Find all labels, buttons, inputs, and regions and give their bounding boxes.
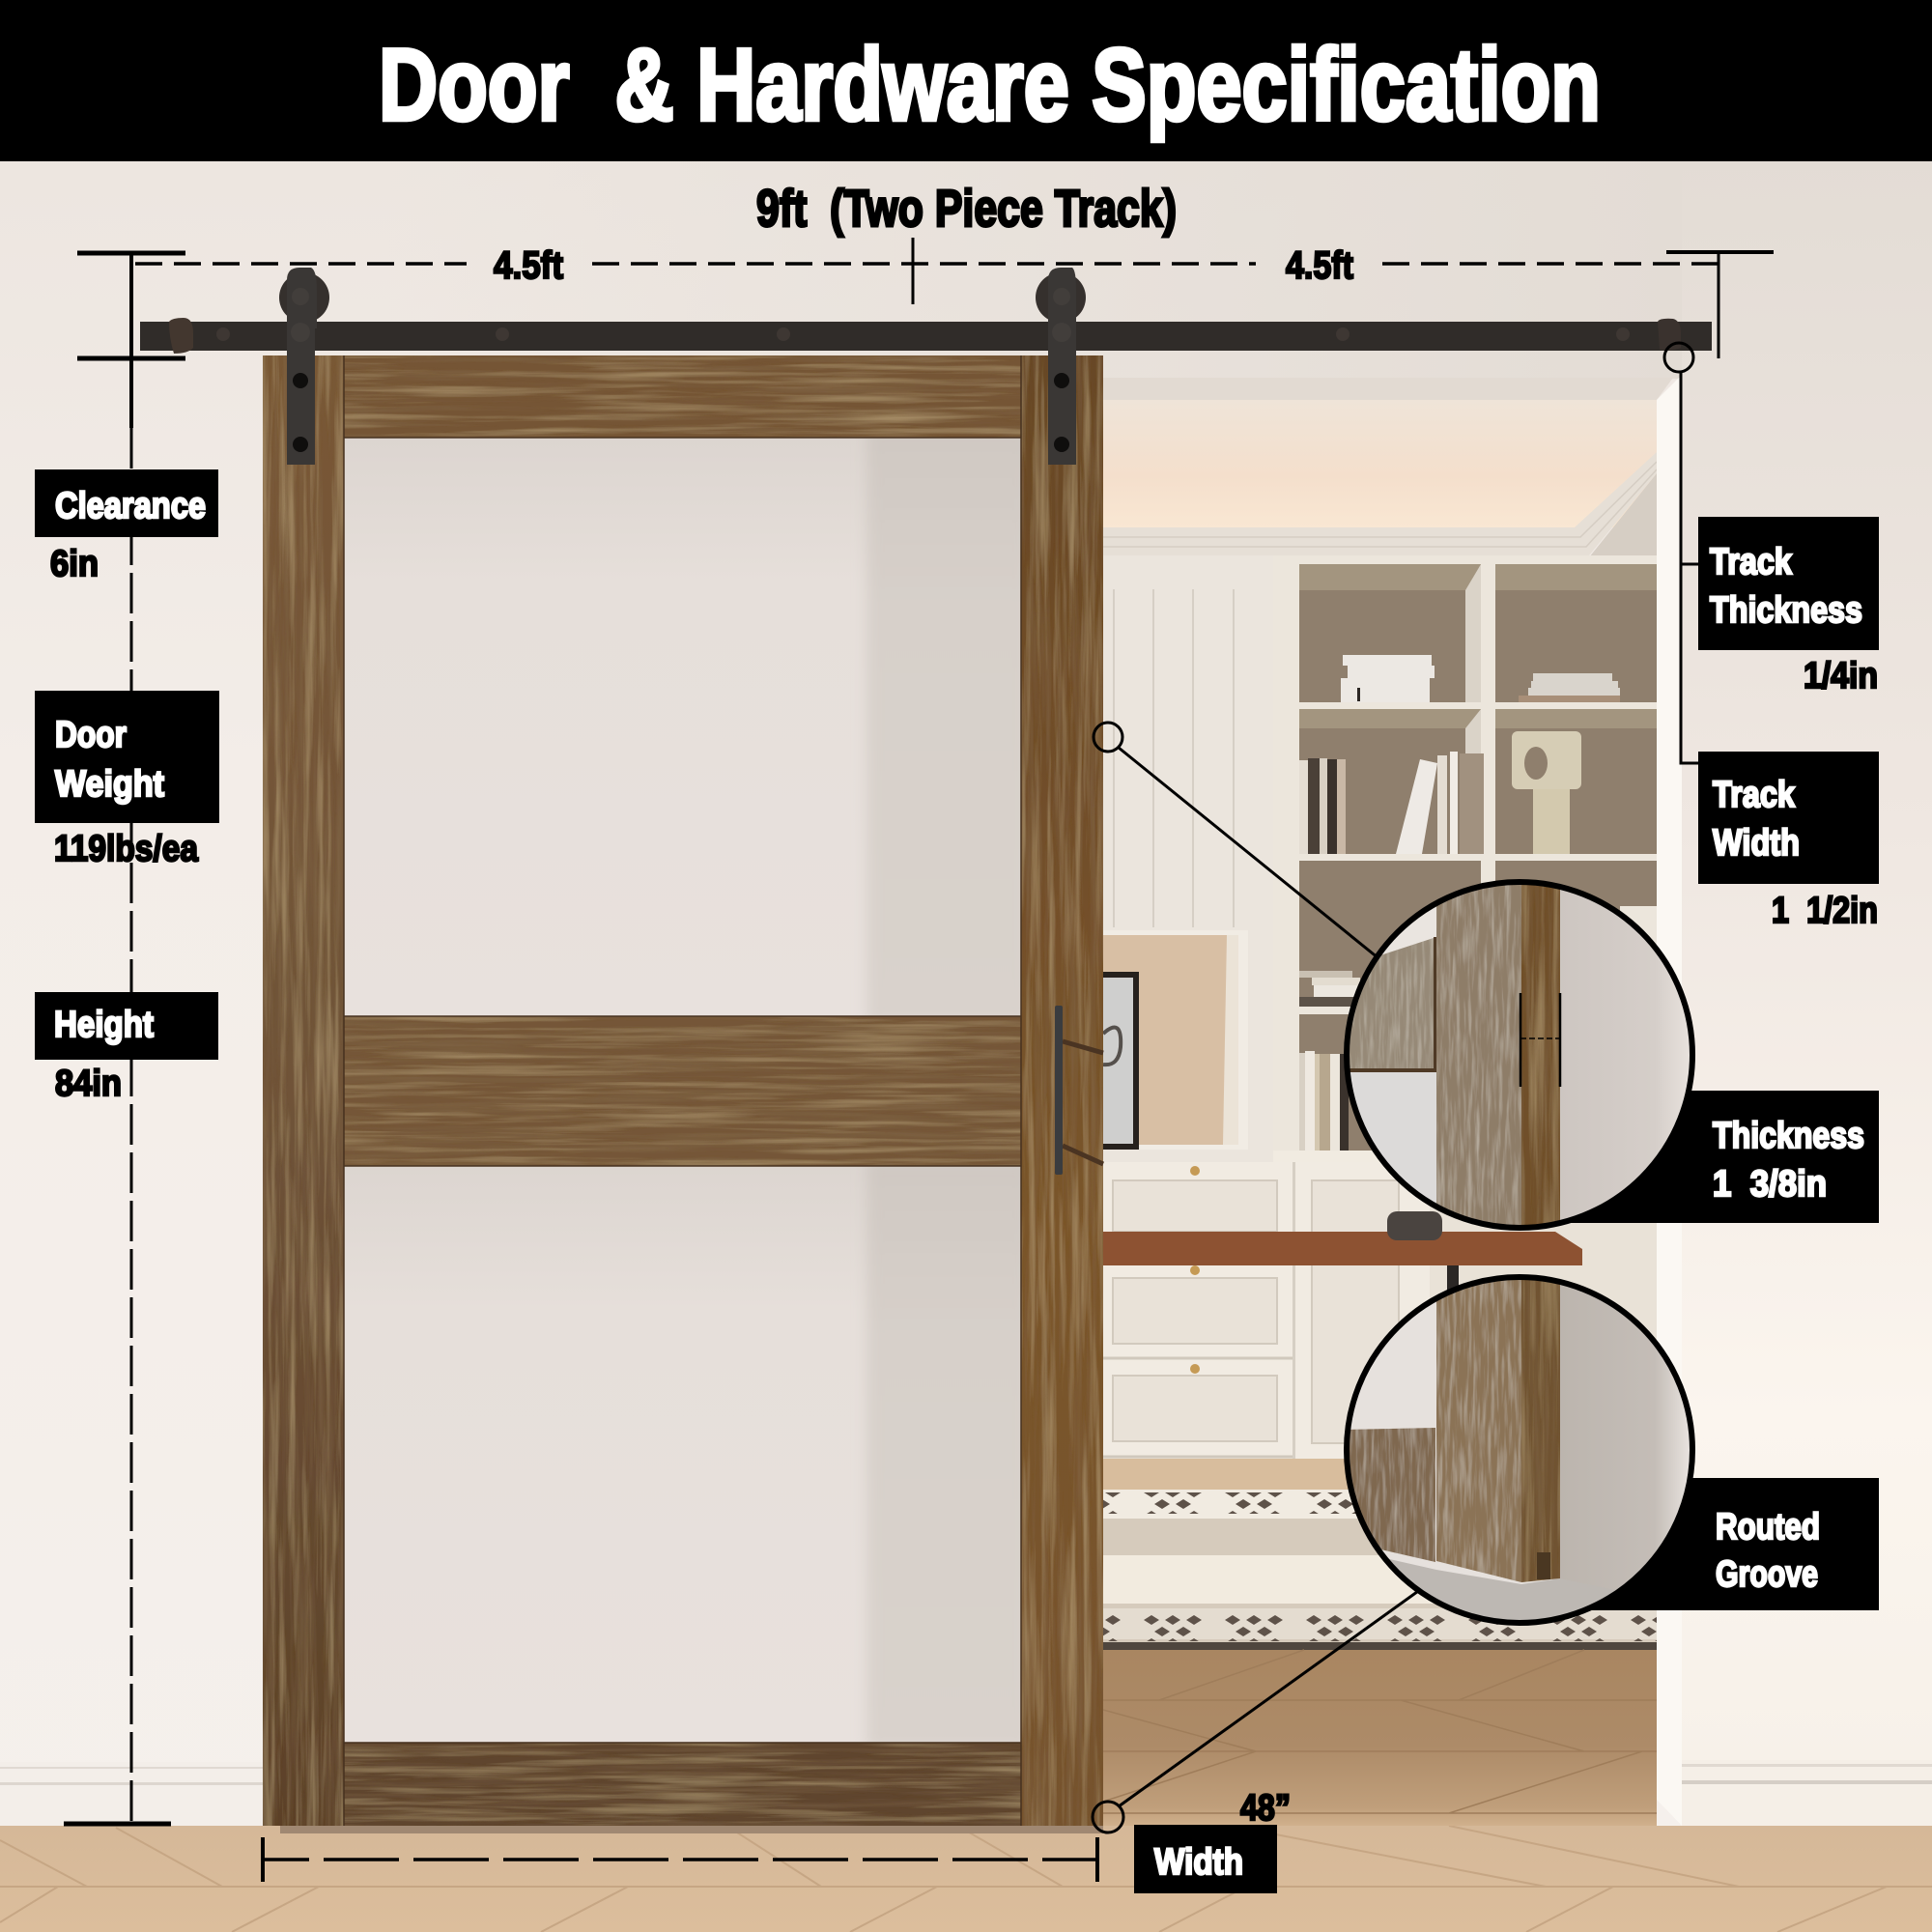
top glass panel (344, 425, 1031, 1024)
label: track thickness: Thickness (1710, 590, 1862, 631)
value: height: 84in (55, 1064, 122, 1104)
left stile (263, 355, 344, 1826)
value: track thickness: 1/4in (1804, 656, 1878, 696)
label: routed groove: Groove (1716, 1554, 1818, 1595)
label: door weight (35, 691, 219, 823)
magnifier: door thickness detail (1347, 882, 1695, 1235)
sculpture (1512, 731, 1581, 854)
bottom glass panel (344, 1159, 1031, 1748)
title: Door & Hardware Specification (379, 28, 1601, 142)
books: middle row (1299, 752, 1484, 854)
room view through doorway (1103, 378, 1673, 1826)
label: track width: Track (1713, 775, 1796, 815)
upper wall shading (386, 155, 1682, 379)
right stile (1021, 355, 1103, 1826)
value: clearance: 6in (50, 544, 99, 584)
bottom rail (344, 1743, 1021, 1826)
left hanger (279, 268, 329, 465)
right wall (1682, 155, 1932, 1835)
header bar (0, 0, 1932, 161)
inner parquet floor (1103, 1650, 1657, 1826)
books: lower row (1299, 906, 1657, 1151)
track dimension lines (64, 238, 1774, 1824)
soffit (1103, 378, 1673, 400)
right hanger (1036, 268, 1086, 465)
rug (1103, 1490, 1657, 1650)
floor (0, 1826, 1932, 1932)
label: routed groove: Routed (1716, 1507, 1820, 1548)
ceiling glow (1103, 400, 1657, 527)
middle rail (344, 1016, 1021, 1166)
right 4.5ft label: 4.5ft (1286, 244, 1353, 287)
label: door thickness: Thickness (1713, 1116, 1864, 1156)
right stop (1658, 319, 1681, 351)
door jamb (1657, 378, 1682, 1826)
track length heading: 9ft (Two Piece Track) (756, 180, 1177, 238)
wall art (1103, 935, 1227, 1150)
callout connector lines (1093, 343, 1698, 1833)
label: track thickness (1698, 517, 1879, 650)
label: routed groove (1546, 1478, 1879, 1610)
barn door (263, 355, 1103, 1826)
label: track thickness: Track (1710, 542, 1793, 582)
table (1103, 1211, 1582, 1294)
right baseboard (1682, 1760, 1932, 1826)
left stop (169, 318, 193, 354)
panelled wall (1103, 555, 1282, 1174)
label: door weight: Weight (55, 764, 164, 805)
left baseboard (0, 1762, 263, 1826)
room side wall (1589, 473, 1657, 557)
door floor shadow (280, 1826, 1103, 1833)
label: clearance: Clearance (55, 486, 206, 526)
label: clearance (35, 469, 218, 537)
books: top left stack (1341, 655, 1435, 702)
label: height: Height (54, 1005, 154, 1045)
track bolts (216, 327, 1630, 341)
top rail (344, 355, 1021, 438)
value: track width: 1 1/2in (1772, 891, 1878, 931)
left 4.5ft label: 4.5ft (494, 244, 563, 287)
value: door weight: 119lbs/ea (54, 829, 199, 869)
label: track width (1698, 752, 1879, 884)
bookcase (1273, 555, 1657, 1174)
cabinets (1103, 1162, 1657, 1459)
magnifier: routed groove detail (1347, 1277, 1695, 1633)
door handle (1055, 1006, 1103, 1175)
label: door thickness: 1 3/8in (1713, 1164, 1827, 1205)
label: width (1134, 1825, 1277, 1893)
crown molding (1103, 452, 1657, 555)
value: width: 48” (1240, 1788, 1291, 1829)
label: door thickness (1546, 1091, 1879, 1223)
track rail (140, 318, 1712, 354)
label: door weight: Door (55, 715, 127, 755)
label: track width: Width (1713, 823, 1800, 864)
books: top right stack (1519, 673, 1620, 702)
label: height (35, 992, 218, 1060)
width dimension line (263, 1837, 1097, 1882)
label: width: Width (1154, 1842, 1243, 1883)
back floor (1103, 1459, 1349, 1490)
